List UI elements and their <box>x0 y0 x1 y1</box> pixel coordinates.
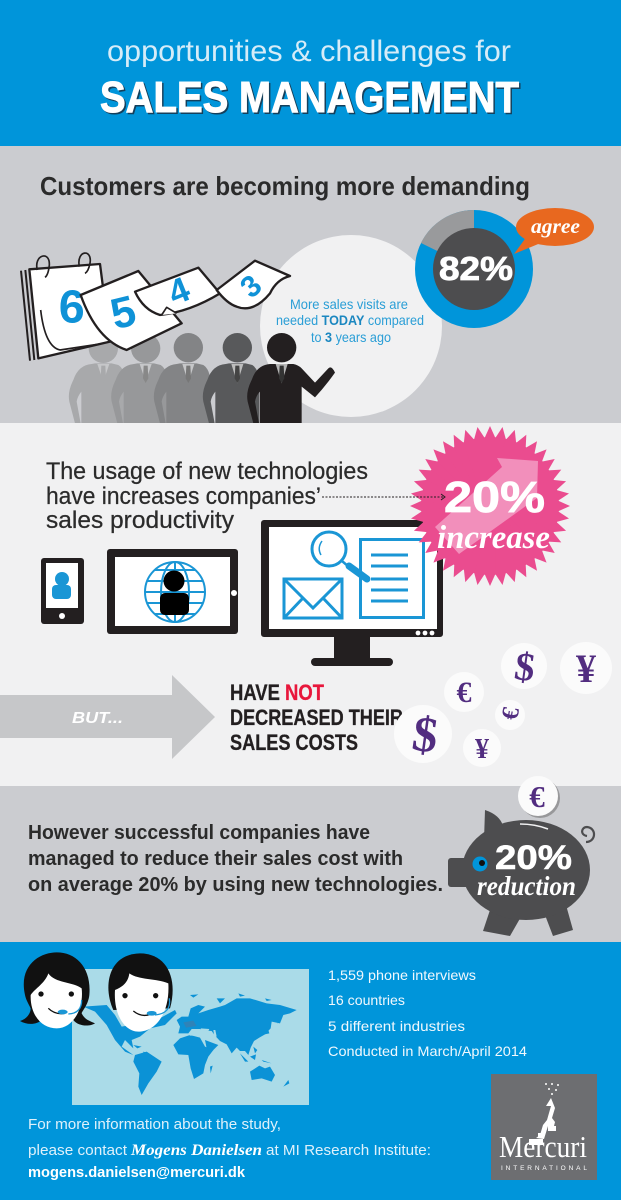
icon: piggy bank: 20% <box>495 839 572 877</box>
text: study facts: 16 countries <box>328 992 405 1008</box>
icon: calendar with flying pages <box>21 253 290 361</box>
icon: calendar with flying pages: 5 <box>106 287 141 339</box>
text: contact information: at MI Research Institute: <box>266 1142 431 1159</box>
arrow: dotted pointer to badge <box>322 494 445 500</box>
icon: piggy bank: reduction <box>477 871 576 901</box>
logo: Mercuri International <box>491 1074 597 1180</box>
chart: 82% agree donut: 82% <box>439 250 513 287</box>
text: study facts: 5 different industries <box>328 1018 465 1034</box>
panel: study footer <box>0 942 621 1200</box>
icon: piggy bank <box>448 810 594 936</box>
text: successful companies: managed to reduce their sales cost with <box>28 848 403 870</box>
title line two: SALES MANAGEMENT <box>102 74 521 124</box>
text: successful companies: on average 20% by using new technologies. <box>28 874 443 896</box>
text: have not decreased their sales costs <box>230 680 403 755</box>
panel: customers are becoming more demanding <box>0 146 621 423</box>
text: have not decreased their sales costs: HAVE NOT <box>230 680 324 705</box>
icon: calendar with flying pages: 3 <box>234 269 268 305</box>
text: more sales visits: More sales visits are <box>290 296 408 312</box>
text: study facts: Conducted in March/April 2014 <box>328 1043 527 1059</box>
text: contact information: For more information about the study, <box>28 1116 281 1133</box>
icon: calendar with flying pages: 4 <box>163 269 196 313</box>
icon: currency coins: ¥ <box>475 734 489 765</box>
icon: currency coins <box>394 642 612 767</box>
icon: currency coins: ¥ <box>576 646 596 691</box>
chart: 82% agree donut <box>415 210 533 328</box>
icon: male call agent <box>108 953 173 1032</box>
text: more sales visits <box>276 296 424 345</box>
text: have not decreased their sales costs: DECREASED THEIR <box>230 705 403 730</box>
text: usage of new technologies: have increases companies’ <box>46 483 321 510</box>
text: successful companies <box>28 822 443 896</box>
logo: Mercuri International: Mercuri <box>499 1129 587 1164</box>
background circle callout <box>260 235 442 417</box>
panel: header <box>0 0 621 146</box>
icon: calendar with flying pages: 6 <box>59 281 85 333</box>
icon: tablet with globe <box>107 549 238 634</box>
badge: 20% increase: increase <box>437 520 550 556</box>
text: contact information: Mogens Danielsen <box>130 1142 262 1159</box>
text: contact information: mogens.danielsen@mercuri.dk <box>28 1164 246 1181</box>
callout: agree: agree <box>531 214 580 238</box>
badge: 20% increase <box>410 426 570 586</box>
title line one: opportunities & challenges for <box>107 35 511 68</box>
icon: smartphone <box>41 558 84 624</box>
icon: euro coin over piggy bank <box>518 776 560 818</box>
badge: 20% increase: 20% <box>444 473 545 522</box>
text: have not decreased their sales costs: SALES COSTS <box>230 730 358 755</box>
icon: row of business people <box>69 333 335 423</box>
text: contact information <box>28 1116 431 1181</box>
callout: agree <box>514 208 594 254</box>
text: more sales visits: needed TODAY compared <box>276 312 424 328</box>
text: usage of new technologies: The usage of new technologies <box>46 458 368 485</box>
text: study facts: 1,559 phone interviews <box>328 967 476 983</box>
text: study facts <box>328 967 527 1059</box>
chart: world map <box>72 969 309 1105</box>
icon: desktop monitor <box>261 520 443 666</box>
panel: reduced sales cost <box>0 776 621 942</box>
title line two: SALES MANAGEMENT <box>100 73 519 122</box>
arrow: but: BUT... <box>72 710 123 727</box>
text: contact information: please contact <box>28 1142 128 1159</box>
icon: euro coin over piggy bank: € <box>529 779 545 814</box>
icon: currency coins: $ <box>512 643 538 690</box>
text: more sales visits: to 3 years ago <box>311 329 391 345</box>
icon: currency coins: € <box>497 706 525 722</box>
icon: female call agent <box>20 952 95 1028</box>
icon: currency coins: $ <box>409 705 442 764</box>
logo: Mercuri International: INTERNATIONAL <box>501 1165 587 1172</box>
heading: customers: Customers are becoming more demanding <box>40 171 530 201</box>
text: usage of new technologies: sales productivity <box>46 507 234 534</box>
text: usage of new technologies <box>46 458 368 534</box>
panel: new technologies <box>0 423 621 786</box>
arrow: but <box>0 675 215 759</box>
icon: currency coins: € <box>456 676 472 709</box>
text: successful companies: However successful companies have <box>28 822 370 844</box>
